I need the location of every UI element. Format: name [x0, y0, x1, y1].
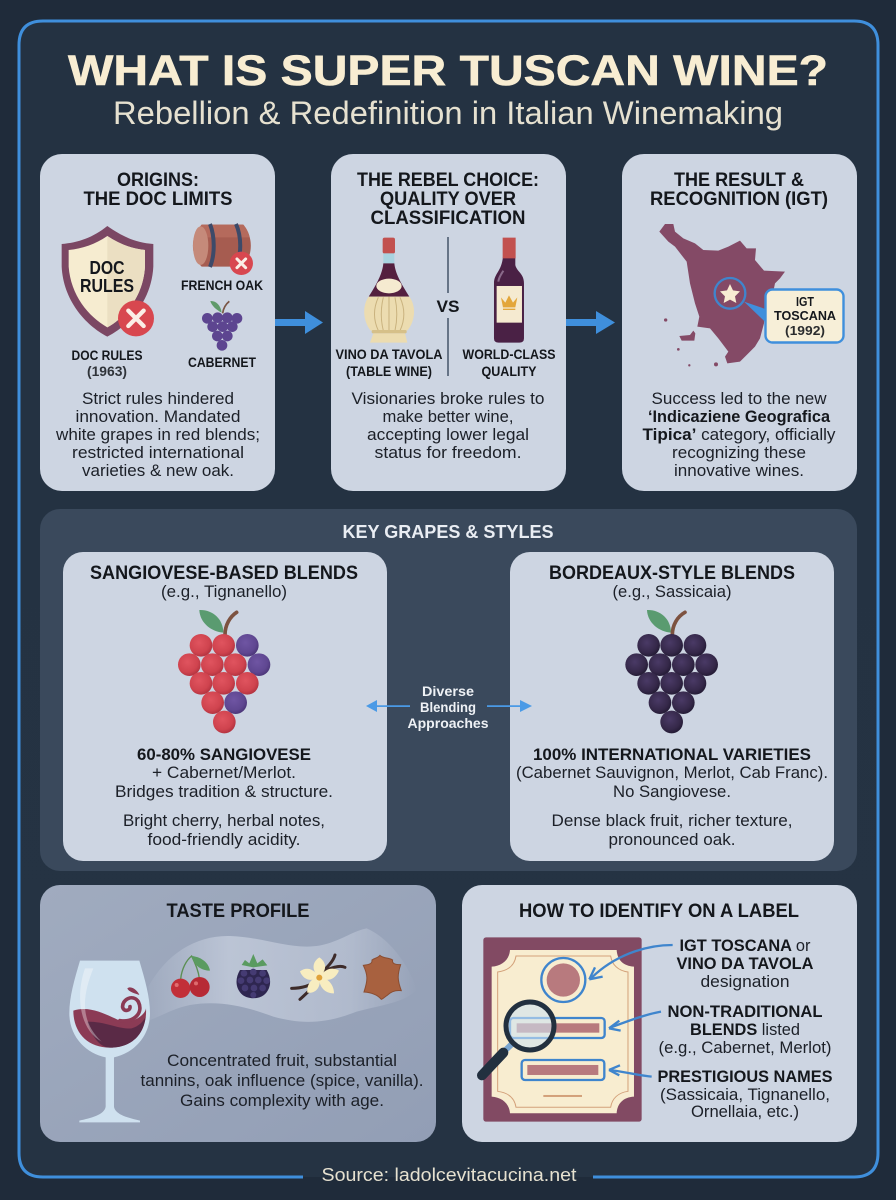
text: origins description: restricted international	[72, 444, 244, 462]
icon: DOC rules shield	[62, 226, 154, 337]
text: Bordeaux composition	[516, 745, 828, 801]
label: diverse blending approaches: Blending	[420, 700, 476, 715]
callout: IGT Toscana 1992: (1992)	[785, 323, 825, 338]
text: origins description: varieties & new oak.	[82, 462, 234, 480]
panel: how to identify on a label	[462, 885, 857, 1142]
text: Sangiovese flavours	[123, 812, 325, 849]
text: rebel description: make better wine,	[382, 408, 514, 426]
text: origins description: innovation. Mandated	[76, 408, 241, 426]
label: French oak: FRENCH OAK	[181, 278, 263, 293]
text: rebel description: status for freedom.	[374, 444, 522, 462]
heading: how to identify: HOW TO IDENTIFY ON A LABEL	[519, 900, 799, 922]
label: diverse blending approaches: Approaches	[408, 716, 488, 731]
heading: rebel choice	[357, 169, 539, 229]
label: DOC rules 1963: (1963)	[87, 364, 127, 379]
text: origins description: white grapes in red blends;	[55, 426, 260, 444]
icon: oak barrel	[193, 224, 253, 275]
heading: result: RECOGNITION (IGT)	[650, 188, 828, 210]
callout: IGT Toscana 1992: TOSCANA	[774, 308, 837, 323]
panel: rebel choice	[331, 154, 566, 491]
label: diverse blending approaches	[408, 684, 488, 731]
text: IGT Toscana designation: VINO DA TAVOLA	[676, 954, 814, 973]
icon: wine bottle with crown	[494, 238, 524, 343]
heading: taste profile: TASTE PROFILE	[166, 900, 310, 922]
text: Sangiovese composition	[115, 745, 333, 801]
source line: Source: ladolcevitacucina.net	[322, 1165, 576, 1185]
arrow: toward Bordeaux	[487, 700, 532, 712]
heading: rebel choice: QUALITY OVER	[380, 188, 516, 210]
text: prestigious names: Ornellaia, etc.)	[691, 1103, 799, 1121]
text: result description	[642, 390, 836, 480]
text: origins description: Strict rules hindered	[82, 390, 234, 408]
text: prestigious names: (Sassicaia, Tignanello,	[660, 1086, 830, 1104]
label: world-class quality	[462, 347, 556, 379]
label: vino da tavola	[336, 347, 443, 379]
card: Sangiovese-based blends	[63, 552, 387, 861]
heading: Bordeaux: (e.g., Sassicaia)	[612, 583, 732, 601]
heading: result	[650, 169, 828, 210]
icon: leather hide	[363, 955, 401, 999]
map: Tuscany	[659, 224, 785, 366]
callout: IGT Toscana 1992	[766, 290, 844, 342]
icon: dark grapes	[625, 610, 718, 733]
heading: Bordeaux	[549, 562, 795, 601]
text: Bordeaux composition: (Cabernet Sauvignon, Merlot, Cab Franc).	[516, 764, 828, 782]
icon: mixed red and purple grapes	[178, 610, 270, 733]
text: result description: ‘Indicaziene Geografica	[648, 408, 831, 426]
subtitle: Rebellion & Redefinition in Italian Winemaking	[113, 95, 783, 131]
text: result description: recognizing these	[672, 444, 806, 462]
icon: blackberry	[237, 954, 270, 998]
heading: rebel choice: CLASSIFICATION	[370, 207, 526, 229]
icon: vanilla flower	[292, 955, 345, 999]
icon: cherries	[171, 956, 210, 998]
text: Bordeaux flavours	[552, 812, 792, 849]
icon: wine glass	[69, 961, 150, 1122]
text: taste description: tannins, oak influence (spice, vanilla).	[140, 1072, 424, 1090]
panel: origins	[40, 154, 275, 491]
divider with VS: VS	[436, 297, 460, 316]
label: world-class quality: QUALITY	[482, 364, 536, 379]
text: non-traditional blends	[658, 1002, 832, 1057]
text: result description: Success led to the new	[652, 390, 827, 408]
text: prestigious names: PRESTIGIOUS NAMES	[658, 1067, 832, 1086]
text: taste description: Concentrated fruit, substantial	[167, 1052, 397, 1070]
text: Bordeaux composition: 100% INTERNATIONAL VARIETIES	[533, 745, 811, 764]
text: taste description: Gains complexity with age.	[180, 1092, 384, 1110]
text: rebel description: accepting lower legal	[367, 426, 529, 444]
text: IGT Toscana designation	[676, 936, 814, 991]
text: Sangiovese flavours: Bright cherry, herbal notes,	[123, 812, 325, 830]
label: vino da tavola: (TABLE WINE)	[346, 364, 432, 379]
divider with VS	[436, 237, 460, 376]
text: Bordeaux composition: No Sangiovese.	[613, 783, 731, 801]
text: Sangiovese composition: Bridges tradition & structure.	[115, 783, 333, 801]
text: non-traditional blends: BLENDS listed	[690, 1020, 800, 1039]
text: origins description	[55, 390, 260, 480]
heading: key grapes: KEY GRAPES & STYLES	[342, 522, 554, 542]
heading: origins: ORIGINS:	[117, 169, 199, 191]
label: diverse blending approaches: Diverse	[422, 684, 475, 699]
text: Bordeaux flavours: Dense black fruit, richer texture,	[552, 812, 792, 830]
text: IGT Toscana designation: designation	[700, 973, 790, 991]
title: WHAT IS SUPER TUSCAN WINE?	[68, 47, 828, 95]
text: result description: Tipica’ category, officially	[642, 426, 836, 444]
text: rebel description: Visionaries broke rules to	[352, 390, 544, 408]
text: Sangiovese composition: 60-80% SANGIOVESE	[137, 745, 311, 764]
label: DOC rules 1963: DOC RULES	[72, 348, 142, 363]
text: taste description	[140, 1052, 424, 1110]
heading: Sangiovese	[90, 562, 358, 601]
label: world-class quality: WORLD-CLASS	[462, 347, 556, 362]
aroma swoosh	[148, 928, 417, 1022]
text: prestigious names	[658, 1067, 832, 1121]
text: non-traditional blends: NON-TRADITIONAL	[668, 1002, 822, 1021]
card: Bordeaux-style blends	[510, 552, 834, 861]
text: Sangiovese composition: + Cabernet/Merlot.	[152, 764, 296, 782]
label: cabernet: CABERNET	[188, 355, 257, 370]
heading: Bordeaux: BORDEAUX-STYLE BLENDS	[549, 562, 795, 584]
panel: taste profile	[40, 885, 436, 1142]
text: rebel description	[352, 390, 544, 462]
icon: cabernet grapes	[202, 301, 242, 351]
label: DOC rules 1963	[72, 348, 142, 379]
callout arrows	[589, 945, 673, 1077]
illustration: wine label with magnifier	[482, 937, 642, 1122]
text: Sangiovese flavours: food-friendly acidity.	[148, 831, 300, 849]
text: result description: innovative wines.	[674, 462, 804, 480]
heading: origins: THE DOC LIMITS	[84, 188, 232, 210]
panel: result and recognition	[622, 154, 857, 491]
text: IGT Toscana designation: IGT TOSCANA or	[680, 936, 811, 955]
icon: DOC rules shield: DOC	[90, 258, 124, 278]
text: non-traditional blends: (e.g., Cabernet, Merlot)	[658, 1039, 832, 1057]
panel: key grapes and styles	[40, 509, 857, 871]
heading: origins	[84, 169, 232, 210]
arrow: rebel choice to result	[566, 311, 615, 334]
heading: Sangiovese: SANGIOVESE-BASED BLENDS	[90, 562, 358, 584]
arrow: toward Sangiovese	[366, 700, 410, 712]
arrow: origins to rebel choice	[275, 311, 323, 334]
heading: Sangiovese: (e.g., Tignanello)	[161, 583, 287, 601]
icon: chianti flask	[364, 238, 414, 343]
callout: IGT Toscana 1992: IGT	[796, 294, 814, 309]
icon: DOC rules shield: RULES	[80, 276, 134, 296]
text: Bordeaux flavours: pronounced oak.	[608, 831, 736, 849]
heading: rebel choice: THE REBEL CHOICE:	[357, 169, 539, 191]
heading: result: THE RESULT &	[674, 169, 804, 191]
label: vino da tavola: VINO DA TAVOLA	[336, 347, 443, 362]
